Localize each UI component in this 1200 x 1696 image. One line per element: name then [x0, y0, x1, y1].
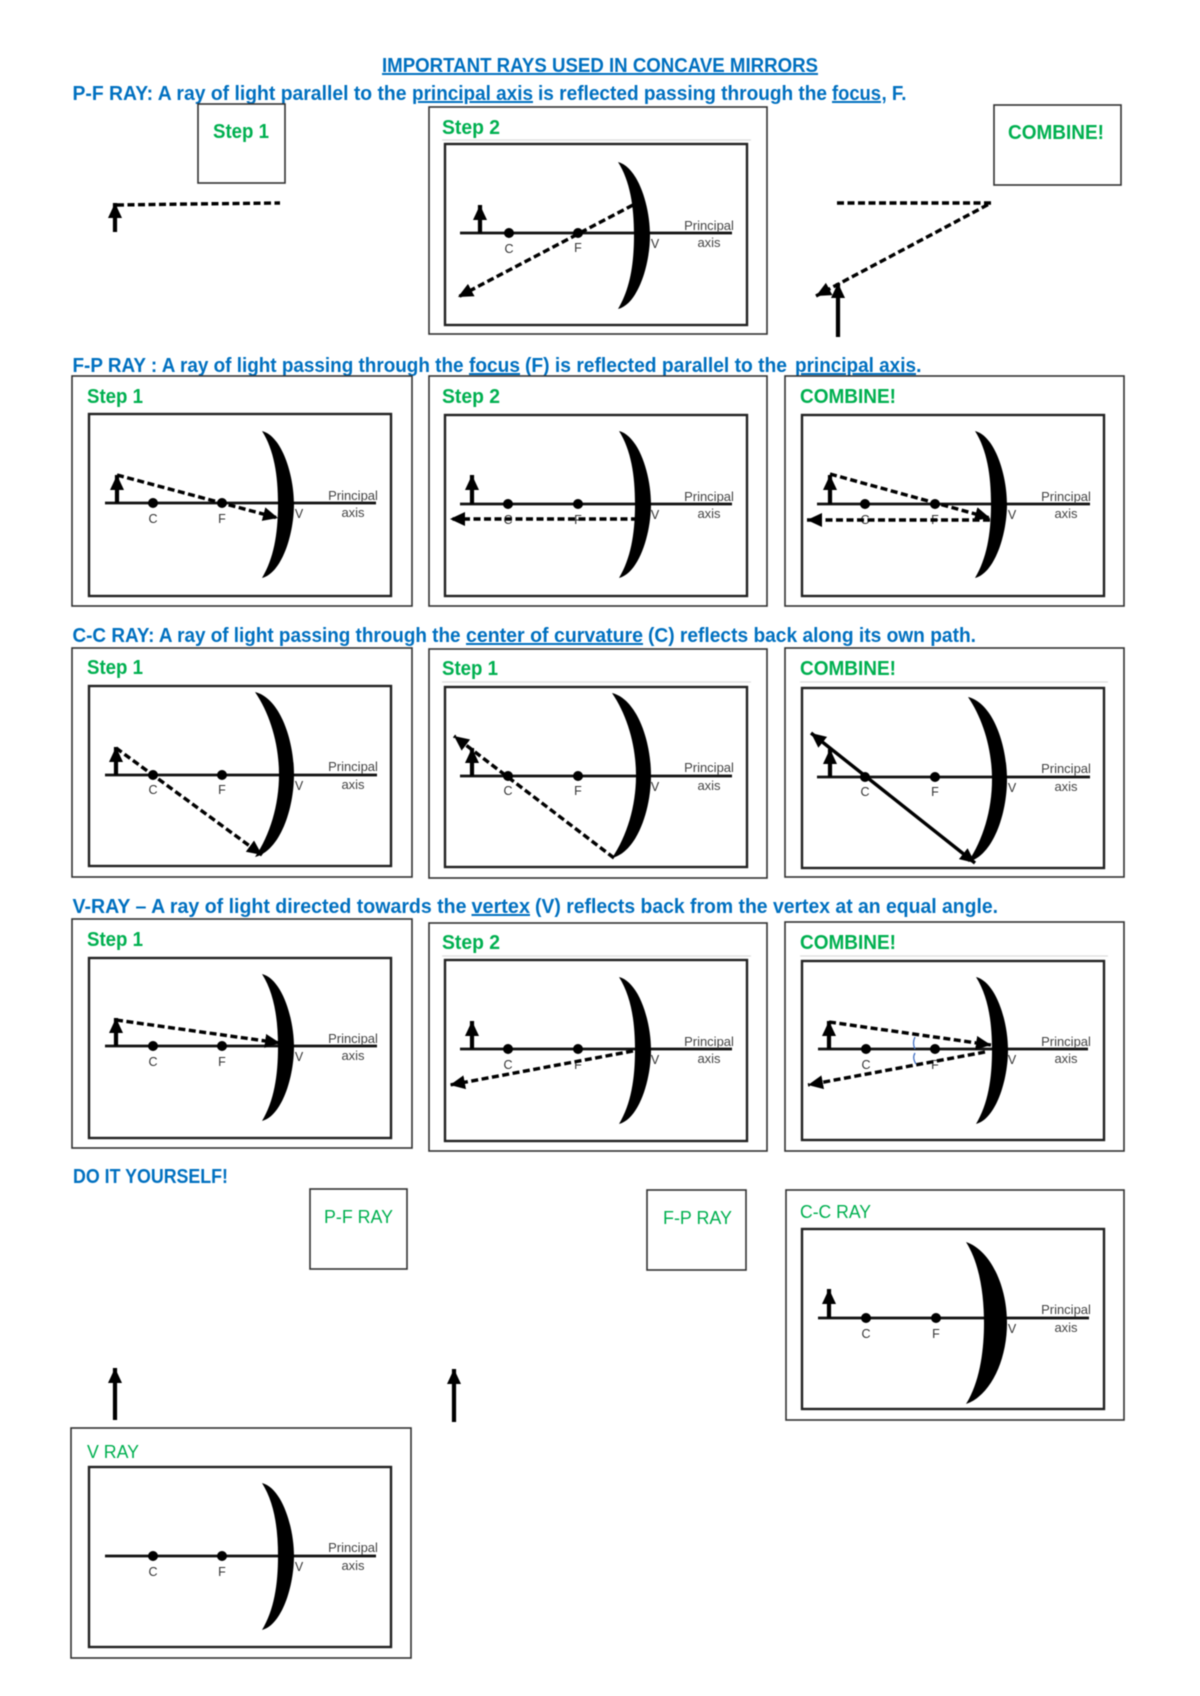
heading: V ray: (V) reflects back from the vertex at an equal angle. — [535, 896, 998, 918]
panel: C-C step 1 reflected: axis — [697, 778, 721, 793]
panel: V ray step 2: Principal — [684, 1034, 734, 1049]
P-F step 1 label box: Step 1 — [213, 121, 269, 143]
heading: P-F ray: principal axis — [412, 83, 533, 105]
heading: F-P ray: . — [916, 355, 922, 377]
heading: F-P ray — [72, 355, 922, 377]
panel: V ray practice: V RAY — [87, 1442, 139, 1462]
panel: P-F step 2: V — [651, 237, 660, 251]
panel: F-P combine: axis — [1054, 506, 1078, 521]
heading: F-P ray: (F) is reflected parallel to the — [525, 355, 787, 377]
panel: V ray combine: V — [1008, 1053, 1017, 1067]
panel: P-F step 2: C — [504, 242, 514, 256]
heading: V ray: vertex — [472, 896, 530, 918]
panel: C-C step 1 reflected: Principal — [684, 760, 734, 775]
panel: C-C combine: Principal — [1041, 761, 1091, 776]
panel: C-C step 1: F — [218, 783, 226, 797]
panel: C-C step 1: C — [148, 783, 158, 797]
heading: F-P ray: principal axis — [795, 355, 916, 377]
panel: P-F step 2: Principal — [684, 218, 734, 233]
panel: F-P step 2: F — [574, 513, 582, 527]
panel: F-P combine: Principal — [1041, 489, 1091, 504]
heading: P-F ray: P-F RAY: A ray of light parallel to the — [72, 83, 406, 105]
panel: C-C ray practice: F — [932, 1327, 940, 1341]
panel: V ray step 1: C — [148, 1055, 158, 1069]
panel: V ray step 1 — [72, 919, 412, 1148]
panel: F-P step 2: C — [503, 513, 513, 527]
panel: F-P combine: C — [860, 513, 870, 527]
panel: V ray step 1: Step 1 — [87, 929, 143, 951]
P-F step 1 drawing: object arrow with parallel ray — [115, 203, 280, 232]
P-F combine drawing: object arrow and reflected ray — [816, 203, 991, 337]
panel: C-C ray practice: C — [861, 1327, 871, 1341]
panel: V ray practice — [71, 1428, 411, 1658]
heading: C-C ray: C-C RAY: A ray of light passing through the — [72, 625, 460, 647]
panel: C-C step 1 reflected: V — [651, 780, 660, 794]
panel: F-P step 2: V — [651, 508, 660, 522]
F-P practice object arrow — [452, 1369, 456, 1422]
panel: C-C step 1: Step 1 — [87, 657, 143, 679]
panel: F-P combine: V — [1008, 508, 1017, 522]
panel: C-C step 1: Principal — [328, 759, 378, 774]
panel: C-C ray practice: axis — [1054, 1320, 1078, 1335]
P-F step 1 label box — [198, 104, 285, 183]
panel: C-C ray practice: Principal — [1041, 1302, 1091, 1317]
panel: C-C combine: F — [931, 785, 939, 799]
F-P ray practice label box — [647, 1190, 746, 1270]
P-F combine label box — [994, 105, 1121, 185]
F-P ray practice label box: F-P RAY — [663, 1208, 732, 1228]
panel: V ray practice: F — [218, 1565, 226, 1579]
panel: V ray step 2: C — [503, 1058, 513, 1072]
panel: V ray step 1: V — [295, 1050, 304, 1064]
panel: V ray practice: axis — [341, 1558, 365, 1573]
panel: P-F step 2: axis — [697, 235, 721, 250]
heading: F-P ray: F-P RAY : A ray of light passing through the — [72, 355, 464, 377]
panel: V ray combine: axis — [1054, 1051, 1078, 1066]
panel: P-F step 2 — [429, 107, 767, 334]
panel: V ray practice: V — [295, 1560, 304, 1574]
panel: V ray step 1: F — [218, 1055, 226, 1069]
panel: F-P step 1: Principal — [328, 488, 378, 503]
heading: V ray: V-RAY – A ray of light directed towards the — [72, 896, 466, 918]
panel: V ray step 2: axis — [697, 1051, 721, 1066]
title: IMPORTANT RAYS USED IN CONCAVE MIRRORS — [382, 55, 818, 77]
panel: F-P step 2: Step 2 — [442, 386, 500, 408]
panel: F-P step 1: V — [295, 507, 304, 521]
panel: F-P combine: F — [931, 513, 939, 527]
panel: F-P step 1: axis — [341, 505, 365, 520]
panel: V ray combine: COMBINE! — [800, 932, 896, 954]
panel: C-C combine: C — [860, 785, 870, 799]
panel: F-P step 1 — [72, 376, 412, 606]
heading: C-C ray: center of curvature — [466, 625, 643, 647]
heading: C-C ray: (C) reflects back along its own path. — [648, 625, 976, 647]
panel: V ray step 1: axis — [341, 1048, 365, 1063]
panel: C-C combine: V — [1008, 781, 1017, 795]
panel: C-C step 1: V — [295, 779, 304, 793]
panel: F-P step 2 — [429, 376, 767, 606]
panel: C-C ray practice — [786, 1190, 1124, 1420]
panel: C-C step 1: axis — [341, 777, 365, 792]
panel: C-C combine: axis — [1054, 779, 1078, 794]
heading: V ray — [72, 896, 998, 918]
P-F practice object arrow — [113, 1368, 117, 1420]
panel: V ray combine: F — [931, 1058, 939, 1072]
panel: P-F step 2: Step 2 — [442, 117, 500, 139]
heading: P-F ray: focus — [832, 83, 881, 105]
heading: P-F ray: is reflected passing through the — [538, 83, 827, 105]
panel: C-C step 1 reflected: F — [574, 784, 582, 798]
panel: V ray practice: Principal — [328, 1540, 378, 1555]
panel: V ray practice: C — [148, 1565, 158, 1579]
heading: P-F ray: , F. — [882, 83, 906, 105]
heading: C-C ray — [72, 625, 976, 647]
panel: C-C step 1 reflected — [429, 649, 767, 878]
panel: C-C step 1 reflected: Step 1 — [442, 658, 498, 680]
panel: C-C ray practice: V — [1008, 1322, 1017, 1336]
heading: P-F ray — [72, 83, 906, 105]
panel: F-P step 1: F — [218, 512, 226, 526]
panel: F-P combine: COMBINE! — [800, 386, 896, 408]
panel: F-P step 1: C — [148, 512, 158, 526]
panel: V ray step 2 — [429, 923, 767, 1151]
panel: F-P step 2: axis — [697, 506, 721, 521]
P-F ray practice label box — [310, 1189, 407, 1269]
P-F combine label box: COMBINE! — [1008, 122, 1104, 144]
panel: V ray combine: C — [861, 1058, 871, 1072]
panel: C-C step 1 — [72, 648, 412, 877]
panel: C-C combine — [785, 648, 1124, 877]
panel: P-F step 2: F — [574, 241, 582, 255]
panel: V ray step 2: F — [574, 1058, 582, 1072]
panel: V ray step 1: Principal — [328, 1031, 378, 1046]
panel: F-P step 1: Step 1 — [87, 386, 143, 408]
panel: V ray combine — [785, 922, 1124, 1151]
panel: V ray step 2: V — [651, 1053, 660, 1067]
panel: C-C combine: COMBINE! — [800, 658, 896, 680]
panel: F-P combine — [785, 376, 1124, 606]
heading: F-P ray: focus — [469, 355, 520, 377]
panel: V ray combine: Principal — [1041, 1034, 1091, 1049]
panel: V ray step 2: Step 2 — [442, 932, 500, 954]
P-F ray practice label box: P-F RAY — [324, 1207, 393, 1227]
panel: C-C ray practice: C-C RAY — [800, 1202, 871, 1222]
panel: F-P step 2: Principal — [684, 489, 734, 504]
heading: do it yourself: DO IT YOURSELF! — [73, 1166, 228, 1188]
panel: C-C step 1 reflected: C — [503, 784, 513, 798]
